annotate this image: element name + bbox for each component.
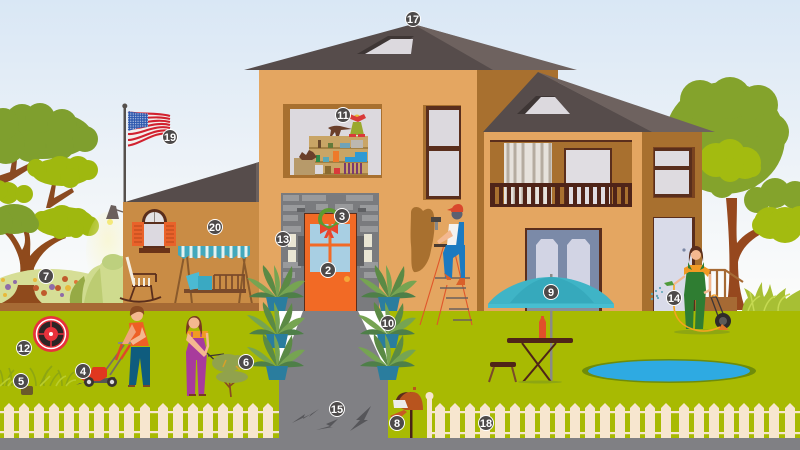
marker 11 (336, 108, 350, 122)
marker 4 (76, 364, 90, 378)
lawn right (388, 311, 800, 438)
marker 8: 8 (394, 418, 400, 430)
toy dinosaur (328, 126, 352, 136)
dead patch of lawn (21, 386, 33, 395)
toy pile (299, 150, 317, 160)
side upper window (653, 147, 695, 198)
American flag (128, 111, 170, 147)
balcony (490, 140, 632, 207)
marker 8 (390, 416, 404, 430)
roof of front wing (483, 72, 715, 132)
back porch railing (702, 270, 743, 311)
marker 12: 12 (18, 343, 30, 355)
man mowing (122, 306, 150, 387)
woman trimming (186, 316, 224, 396)
side door (653, 217, 695, 311)
marker 13 (276, 232, 290, 246)
marker 6: 6 (243, 357, 249, 369)
left tree (0, 103, 99, 304)
marker 17: 17 (407, 14, 419, 26)
garden umbrella (488, 274, 614, 382)
front door (304, 213, 357, 311)
marker 15: 15 (331, 404, 343, 416)
number markers (14, 12, 682, 430)
marker 20: 20 (209, 222, 221, 234)
upper right window (423, 105, 461, 200)
rocking chair (120, 257, 161, 302)
upper display window (283, 104, 382, 178)
wall lamp (106, 205, 123, 225)
marker 2: 2 (325, 265, 331, 277)
mailbox (390, 387, 423, 438)
marker 19 (162, 130, 178, 144)
left wing wall (123, 202, 260, 304)
wall patch being repaired (411, 207, 435, 272)
marker 2 (320, 262, 336, 278)
marker 10 (380, 316, 396, 330)
lawn mower (76, 342, 132, 387)
marker 14 (666, 290, 682, 306)
marker 9 (544, 284, 558, 300)
marker 4: 4 (80, 366, 87, 378)
patio table with bottle (507, 316, 573, 384)
marker 3 (334, 208, 350, 224)
hedge bushes (70, 254, 124, 303)
garden flower bed (0, 269, 95, 304)
back house side wall (477, 70, 558, 136)
marker 19: 19 (164, 132, 176, 144)
road strip (0, 438, 800, 450)
lawn grass clumps (0, 366, 76, 386)
marker 17 (406, 12, 420, 26)
ground floor patio door (525, 228, 602, 311)
potted plants left row (247, 265, 305, 380)
main house wall (259, 70, 477, 311)
marker 14: 14 (668, 293, 681, 305)
marker 5 (14, 374, 28, 388)
pond (582, 359, 756, 383)
driveway cracks (292, 406, 371, 431)
right picket fence (426, 392, 800, 438)
ornamental grass (742, 282, 800, 311)
lawn left (0, 311, 279, 438)
left picket fence (0, 403, 279, 438)
shelves (294, 136, 368, 175)
left wing roof (125, 162, 259, 202)
marker 3: 3 (339, 211, 345, 223)
marker 7 (38, 268, 54, 284)
toy clown (348, 114, 366, 137)
arched window with shutters (132, 209, 176, 253)
marker 15 (330, 402, 344, 416)
flag pole (122, 104, 127, 203)
porch swing (175, 246, 252, 304)
marker 11: 11 (337, 110, 349, 122)
stone door surround (281, 193, 379, 311)
marker 7: 7 (43, 271, 49, 283)
marker 18: 18 (480, 418, 492, 430)
door wreath (320, 210, 338, 238)
wall sconces (288, 234, 372, 262)
marker 10: 10 (382, 318, 394, 330)
marker 5: 5 (18, 376, 24, 388)
ladder (420, 244, 472, 325)
right tree (665, 77, 800, 310)
marker 12 (16, 340, 32, 356)
main roof (244, 24, 577, 70)
wing column strip (477, 132, 484, 311)
marker 6 (238, 354, 254, 370)
gardener watering (651, 246, 730, 334)
driveway path (279, 311, 388, 438)
lamp glow (86, 212, 130, 292)
marker 18 (478, 416, 494, 430)
brown porch strip (0, 303, 260, 311)
wing side wall (642, 132, 702, 311)
front wing wall (484, 132, 642, 311)
painter on ladder (431, 204, 465, 285)
sky background (0, 0, 800, 312)
marker 9: 9 (548, 287, 554, 299)
sprinkler head (33, 316, 69, 352)
potted plants right row (358, 265, 417, 380)
marker 13: 13 (277, 234, 289, 246)
trimmed shrub (212, 354, 248, 397)
patio stool (489, 362, 516, 382)
hose reel (674, 285, 731, 331)
marker 20 (208, 220, 222, 234)
